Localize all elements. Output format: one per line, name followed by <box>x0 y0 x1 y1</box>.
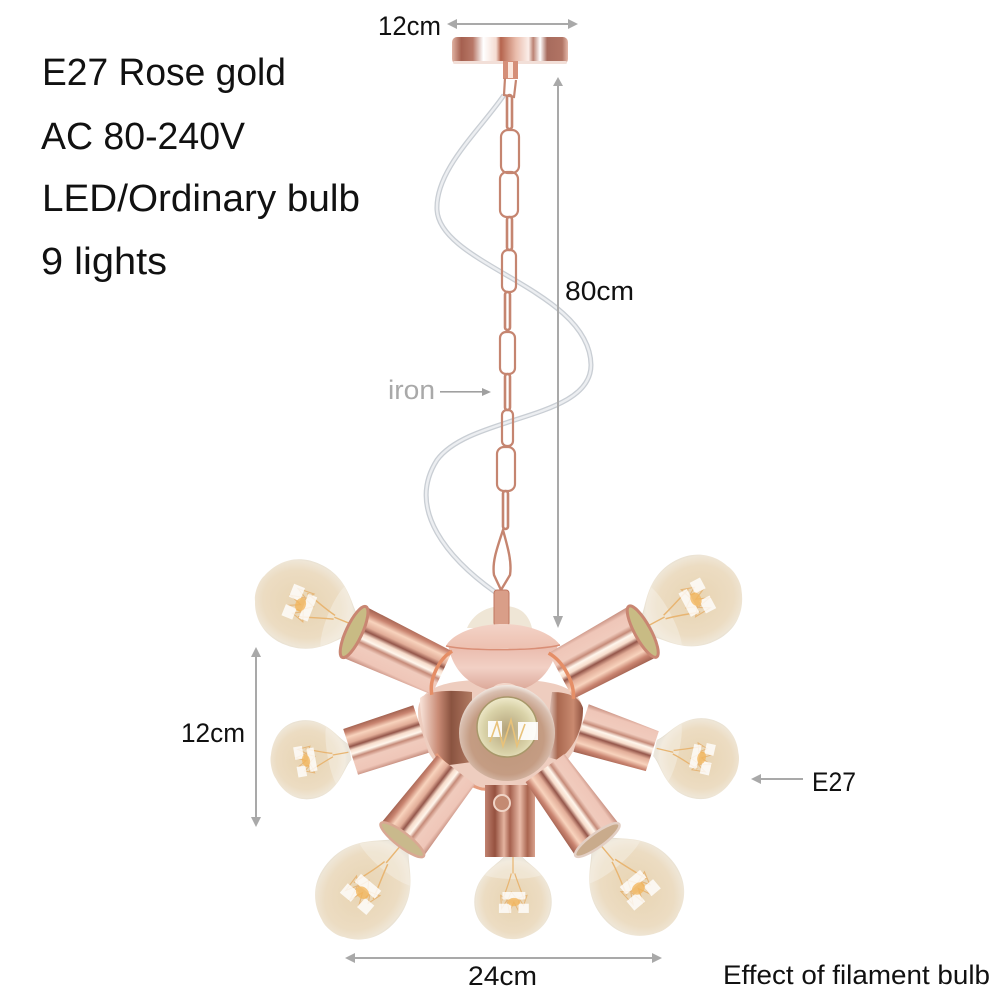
socket: middle right <box>573 704 660 775</box>
bulb: bottom centre <box>474 855 552 939</box>
bulb: top left <box>241 545 372 667</box>
specification text: LED/Ordinary bulb <box>42 178 360 220</box>
caption: filament bulb effect: Effect of filament bulb <box>723 960 990 990</box>
arrow: E27 pointer <box>751 774 803 784</box>
socket: bottom right <box>523 752 623 862</box>
specification text: E27 Rose gold <box>42 52 286 94</box>
label: 80cm: 80cm <box>565 276 634 306</box>
specification text <box>41 52 360 283</box>
socket: middle left <box>343 705 429 776</box>
arrow: lamp width dimension <box>345 953 662 963</box>
socket: top left <box>335 603 454 698</box>
label: 12cm left: 12cm <box>181 718 245 748</box>
label: 24cm: 24cm <box>468 961 537 991</box>
central hub <box>418 624 583 792</box>
socket: top right <box>547 602 664 701</box>
chain <box>494 78 519 590</box>
label: iron with arrow <box>388 375 491 405</box>
label: 12cm top: 12cm <box>378 11 441 41</box>
arrow: top width dimension <box>447 19 578 29</box>
specification text: 9 lights <box>41 241 167 283</box>
ceiling plate <box>452 37 568 79</box>
bulb: middle right <box>646 709 747 807</box>
central bulb <box>459 685 555 781</box>
nine-light sputnik lamp <box>241 539 759 959</box>
specification text: AC 80-240V <box>41 116 246 158</box>
arrow: lamp height dimension <box>251 647 261 827</box>
arrow: height dimension <box>553 77 563 628</box>
back bulb <box>467 606 532 628</box>
socket: bottom centre <box>485 785 535 857</box>
chain hook post <box>494 590 509 626</box>
bulb: bottom right <box>564 813 703 955</box>
label: iron with arrow: iron <box>388 375 435 405</box>
label: E27: E27 <box>812 767 856 797</box>
socket: bottom left <box>377 754 477 862</box>
bulb: bottom left <box>296 815 436 959</box>
bulb: top right <box>623 539 759 668</box>
bulb: middle left <box>264 713 357 805</box>
power cable <box>426 95 591 592</box>
